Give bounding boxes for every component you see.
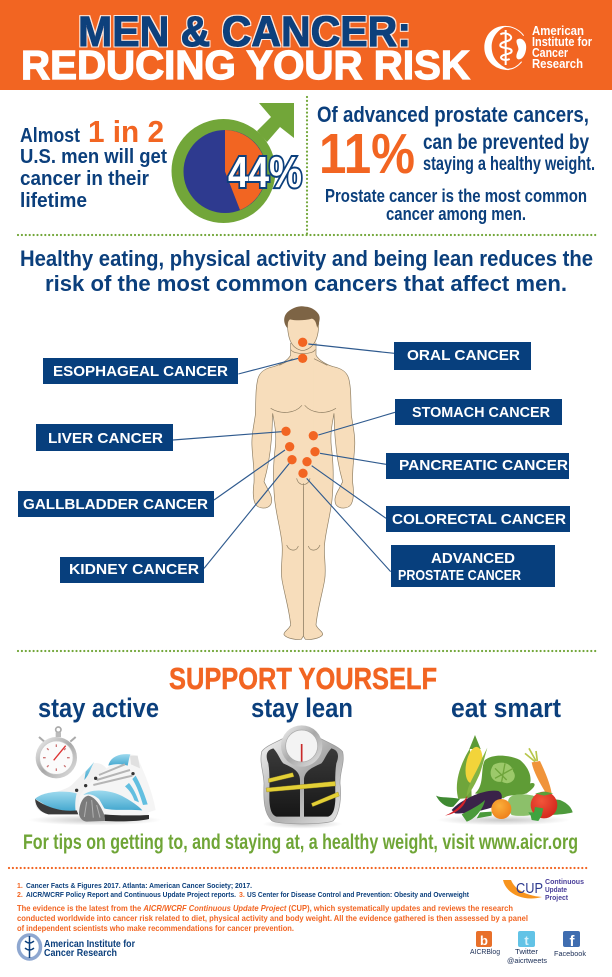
icon: bathroom scale with tape measure [261, 725, 343, 829]
hair [284, 306, 320, 328]
icon: facebook: Facebook [554, 951, 587, 958]
icon: facebook: f [570, 933, 576, 950]
footnotes: Cancer Facts & Figures 2017. Atlanta: American Cancer Society; 2017. [26, 883, 252, 890]
icon: twitter: Twitter [515, 949, 539, 956]
footnotes: AICR/WCRF Policy Report and Continuous Update Project reports. [26, 892, 236, 899]
label: liver cancer: LIVER CANCER [48, 430, 163, 447]
logo: AICR footer: Cancer Research [44, 948, 117, 959]
label: advanced prostate cancer: ADVANCED [431, 550, 515, 567]
icon: stopwatch and running shoes [28, 727, 162, 825]
label: kidney cancer: KIDNEY CANCER [69, 561, 199, 578]
head [287, 315, 319, 351]
label: advanced prostate cancer: PROSTATE CANCER [398, 567, 521, 584]
evidence paragraph: The evidence is the latest from the AICR/WCRF Continuous Update Project (CUP), which systematically updates and reviews the research [17, 903, 513, 913]
icon: AICR blog: b [480, 933, 488, 948]
cucumber [530, 796, 573, 815]
left statistic text: 1 in 2: 1 in 2 [88, 114, 164, 149]
logo: American Institute for Cancer Research: Research [532, 57, 583, 71]
stopwatch [36, 727, 77, 778]
right statistic text: 11% [317, 102, 595, 224]
footnotes [17, 883, 470, 899]
logo: American Institute for Cancer Research: American [532, 24, 584, 38]
label: advanced prostate cancer [391, 545, 555, 587]
left statistic text: 1 in 2: U.S. men will get [20, 146, 167, 168]
logo: American Institute for Cancer Research [484, 24, 592, 71]
left shoe [35, 763, 108, 814]
label: gallbladder cancer: GALLBLADDER CANCER [23, 496, 208, 513]
footnotes: 2. [17, 892, 23, 899]
right shoe [79, 754, 156, 822]
label: oral cancer [394, 342, 531, 370]
logo: American Institute for Cancer Research: Institute for [532, 35, 592, 49]
label: stomach cancer: STOMACH CANCER [412, 404, 550, 421]
label: colorectal cancer [386, 506, 570, 532]
label: stomach cancer [395, 399, 562, 425]
logo: American Institute for Cancer Research: Cancer [532, 46, 568, 60]
icon: twitter: @aicrtweets [507, 958, 548, 965]
left statistic text: 1 in 2: Almost [20, 125, 80, 147]
subheadings: stay active [38, 693, 159, 723]
icon: twitter [507, 931, 548, 965]
body right half [303, 343, 355, 639]
tomato [531, 792, 557, 818]
title: MEN & CANCER: [78, 9, 411, 56]
label: esophageal cancer: ESOPHAGEAL CANCER [53, 363, 228, 380]
heading: support yourself: SUPPORT YOURSELF [169, 661, 437, 696]
label: esophageal cancer [43, 358, 238, 384]
title: REDUCING YOUR RISK [21, 42, 470, 88]
logo: Continuous Update Project: CUP [516, 880, 543, 897]
right statistic text: 11%: 11% [319, 122, 415, 186]
evidence paragraph: of independent scientists who make recommendations for cancer prevention. [17, 923, 294, 933]
lettuce [475, 756, 535, 798]
evidence paragraph [17, 903, 528, 933]
label: kidney cancer [60, 557, 204, 583]
connector lines [173, 344, 395, 572]
left statistic text: 1 in 2 [20, 114, 167, 212]
male symbol pie chart: 44%: 44% [228, 148, 302, 197]
label: liver cancer [36, 424, 173, 451]
label: colorectal cancer: COLORECTAL CANCER [392, 511, 566, 528]
section heading [20, 246, 593, 296]
logo: Continuous Update Project: Continuous [545, 877, 584, 886]
logo: Continuous Update Project [503, 877, 584, 902]
body figure with cancer sites [173, 306, 395, 639]
male symbol pie chart: 44% [172, 103, 302, 223]
section heading: risk of the most common cancers that affect men. [45, 271, 567, 296]
right statistic text: 11%: cancer among men. [386, 204, 526, 224]
left statistic text: 1 in 2: cancer in their [20, 168, 149, 190]
footnotes: US Center for Disease Control and Prevention: Obesity and Overweight [247, 892, 470, 899]
logo: Continuous Update Project: Project [545, 893, 568, 902]
body left half [252, 343, 303, 639]
evidence paragraph: conducted worldwide into cancer risk related to diet, physical activity and body weight. All the evidence gathered is then assessed by a panel [17, 913, 528, 923]
label: gallbladder cancer [18, 491, 214, 517]
footnotes: 3. [239, 892, 245, 899]
icon: AICR blog: AICRBlog [470, 949, 500, 956]
logo: AICR footer: American Institute for [44, 939, 135, 950]
footnotes: 1. [17, 883, 23, 890]
left statistic text: 1 in 2: lifetime [20, 190, 87, 212]
title [21, 9, 470, 88]
label: pancreatic cancer [386, 453, 569, 479]
left leaves, eggplant and chili [436, 796, 460, 807]
cancer site dots [281, 338, 320, 478]
label: pancreatic cancer: PANCREATIC CANCER [399, 457, 568, 474]
icon: facebook [554, 931, 587, 958]
header banner [0, 0, 612, 90]
icon: vegetables [436, 735, 573, 825]
icon: AICR blog [470, 931, 500, 956]
icon: twitter: t [524, 933, 529, 948]
carrot [525, 748, 537, 762]
logo: AICR footer [18, 935, 135, 959]
subheadings: eat smart [451, 693, 561, 723]
label: oral cancer: ORAL CANCER [407, 347, 520, 364]
logo: Continuous Update Project: Update [545, 885, 567, 894]
subheadings [38, 693, 561, 723]
subheadings: stay lean [251, 693, 353, 723]
